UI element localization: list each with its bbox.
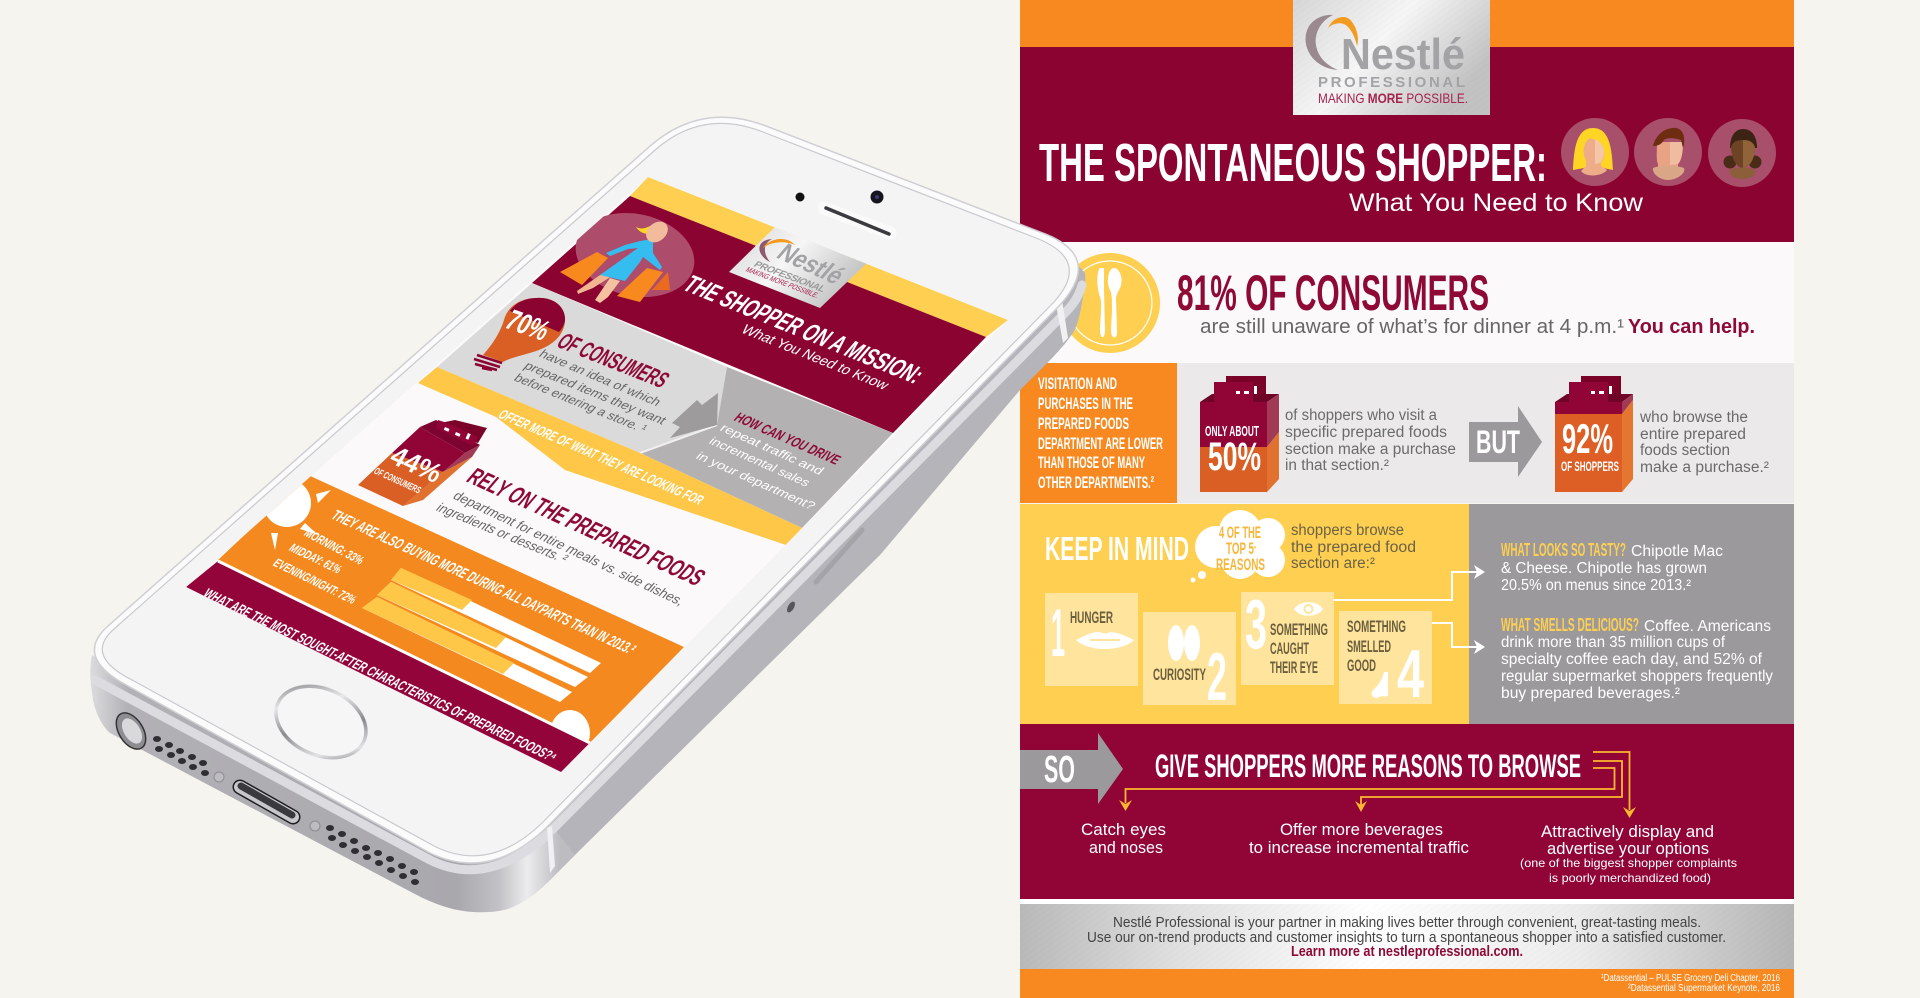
arrow: connector to tasty	[1334, 565, 1485, 600]
panel: footer message: Use our on-trend products and customer insights to turn a spontaneous shopper into a satisfied customer.	[1087, 930, 1726, 946]
delicious text: regular supermarket shoppers frequently	[1501, 668, 1773, 685]
call to action: You can help.	[1628, 316, 1755, 338]
arrow: to catch eyes	[1119, 768, 1614, 811]
screen: dayparts legend: MORNING: 33%	[301, 526, 368, 567]
screen: dayparts legend: MIDDAY: 61%	[286, 541, 346, 576]
visitation text block: PREPARED FOODS	[1038, 414, 1129, 433]
text: attractively display: Attractively display and	[1541, 823, 1714, 841]
screen: logo: Nestlé	[771, 239, 851, 289]
screen: 70%: 70%	[499, 305, 556, 347]
text: attractively display: is poorly merchandized food)	[1549, 871, 1711, 885]
screen: white wedge	[640, 425, 717, 453]
screen: yellow top band	[630, 177, 1008, 337]
panel: what looks tasty, what smells delicious	[1334, 504, 1794, 724]
reason 4: something smelled good: 4	[1397, 636, 1424, 712]
phone front camera and sensor	[796, 190, 884, 204]
panel: infographic page	[1020, 0, 1794, 998]
screen: rely text: ingredients or desserts. ²	[433, 500, 572, 566]
phone home button	[265, 673, 377, 771]
screen: footer divider	[218, 561, 590, 743]
panel: sources: ¹Datassential – PULSE Grocery Deli Chapter, 2016	[1601, 973, 1780, 984]
screen: maroon header	[532, 196, 986, 433]
tasty text: & Cheese. Chipotle has grown	[1501, 560, 1707, 577]
heading: KEEP IN MIND	[1045, 530, 1189, 567]
screen: drive traffic text: incremental sales	[706, 435, 813, 489]
panel: purchase comparison	[1177, 363, 1794, 503]
delicious text: buy prepared beverages.²	[1501, 685, 1680, 702]
reason 4: something smelled good: SOMETHING	[1347, 617, 1406, 636]
tasty text: 20.5% on menus since 2013.²	[1501, 577, 1691, 594]
text: attractively display: advertise your options	[1547, 840, 1709, 858]
tasty text	[1501, 540, 1723, 594]
shoppers who browse text: make a purchase.²	[1640, 459, 1769, 476]
screen: yellow swoosh	[418, 367, 802, 545]
screen: drive traffic text: HOW CAN YOU DRIVE	[730, 410, 844, 468]
reason 1: hunger: HUNGER	[1070, 608, 1113, 627]
reason 4: something smelled good	[1339, 611, 1432, 712]
subtitle: What You Need to Know	[1349, 189, 1644, 217]
screen: sun icon	[266, 484, 331, 550]
delicious text: specialty coffee each day, and 52% of	[1501, 651, 1763, 668]
screen: light grey panel	[437, 283, 727, 453]
shoppers who visit text: in that section.²	[1285, 457, 1389, 474]
icon: plate with fork and spoon	[1060, 253, 1160, 353]
visitation text block: PURCHASES IN THE	[1038, 394, 1133, 413]
screen: dayparts legend	[272, 530, 364, 604]
text: offer beverages: to increase incremental traffic	[1249, 839, 1469, 857]
arrow: to offer beverages	[1355, 761, 1622, 812]
text: attractively display: (one of the biggest shopper complaints	[1520, 856, 1737, 870]
screen: shopper illustration	[560, 213, 694, 303]
logo: Nestle Professional: Nestlé	[1341, 30, 1465, 79]
screen: of consumers heading: OF CONSUMERS	[551, 329, 675, 393]
logo: Nestle Professional	[1293, 0, 1490, 115]
shoppers who visit text: specific prepared foods	[1285, 424, 1447, 441]
reason 2: curiosity: CURIOSITY	[1153, 665, 1206, 684]
delicious text: Coffee. Americans	[1644, 618, 1771, 635]
visitation text block: THAN THOSE OF MANY	[1038, 453, 1145, 472]
phone mockup	[90, 117, 1085, 912]
screen: subtitle: What You Need to Know	[737, 322, 893, 393]
reason 3: something caught their eye: CAUGHT	[1270, 639, 1309, 658]
screen: footer text: WHAT ARE THE MOST SOUGHT-AFTER CHARACTERISTICS OF PREPARED FOODS?⁴	[199, 586, 560, 765]
reason 4: something smelled good: GOOD	[1347, 656, 1376, 675]
delicious text: WHAT SMELLS DELICIOUS?	[1501, 615, 1639, 635]
screen: maroon footer	[186, 561, 590, 776]
icon: bag 50%: ONLY ABOUT	[1205, 423, 1259, 440]
phone left speaker grille	[153, 736, 209, 776]
logo: Nestle Professional: MAKING MORE POSSIBLE.	[1318, 90, 1468, 106]
reason 2: curiosity	[1143, 612, 1236, 715]
icon: bag 92%: OF SHOPPERS	[1561, 458, 1619, 474]
screen: swoosh text: OFFER MORE OF WHAT THEY ARE LOOKING FOR	[494, 407, 707, 508]
screen: drive traffic text: in your department?	[693, 450, 818, 512]
phone side face	[500, 245, 1085, 883]
reason 1: hunger: 1	[1051, 595, 1065, 671]
shoppers who browse text	[1639, 409, 1769, 476]
text: offer beverages: Offer more beverages	[1280, 821, 1443, 839]
shoppers who browse text: entire prepared	[1640, 426, 1746, 443]
panel: footer message: Nestlé Professional is your partner in making lives better through convenient, great-tasting meals.	[1113, 915, 1701, 931]
screen: arrow	[670, 393, 718, 438]
shoppers who browse text: foods section	[1640, 442, 1730, 459]
screen: dayparts legend: EVENING/NIGHT: 72%	[270, 556, 360, 607]
icon: bag 50%	[1200, 376, 1279, 492]
arrow: connector to delicious	[1432, 623, 1485, 654]
reason 3: something caught their eye: THEIR EYE	[1270, 658, 1318, 677]
panel: footer message	[1020, 899, 1794, 969]
phone screen	[186, 177, 1008, 772]
shoppers who visit text: section make a purchase	[1285, 441, 1456, 458]
screen: rely text: department for entire meals vs. side dishes,	[450, 488, 688, 608]
panel: visitation	[1020, 363, 1177, 503]
phone side buttons	[785, 530, 862, 614]
title: THE SPONTANEOUS SHOPPER:	[1039, 133, 1547, 193]
header band	[1020, 0, 1794, 242]
screen: 44%: 44%	[385, 440, 448, 489]
heading: GIVE SHOPPERS MORE REASONS TO BROWSE	[1155, 748, 1581, 784]
screen: bag label: OF CONSUMERS	[371, 466, 423, 496]
reasons intro text: the prepared food	[1291, 539, 1416, 556]
text: offer beverages	[1249, 821, 1469, 857]
screen: logo: PROFESSIONAL	[751, 260, 828, 295]
screen: consumers text: prepared items they want	[521, 359, 670, 427]
phone glass inner rim	[102, 123, 1069, 856]
text: catch eyes: and noses	[1089, 839, 1163, 857]
arrow: to display	[1593, 752, 1636, 818]
reason 2: curiosity: 2	[1207, 639, 1227, 715]
shoppers who visit text: of shoppers who visit a	[1285, 407, 1437, 424]
screen: bag 44%	[358, 420, 487, 506]
thought cloud: REASONS	[1216, 555, 1265, 574]
text: catch eyes	[1081, 821, 1166, 857]
panel: sources: ²Datassential Supermarket Keynote, 2016	[1628, 983, 1780, 994]
reasons intro text: section are:²	[1291, 555, 1375, 572]
icon: brown-haired shopper avatar	[1634, 118, 1702, 186]
screen: dayparts heading: THEY ARE ALSO BUYING MORE DURING ALL DAYPARTS THAN IN 2013.²	[327, 508, 639, 658]
screen: drive traffic text	[693, 410, 844, 512]
icon: dark-haired shopper avatar	[1708, 119, 1776, 187]
stat description: are still unaware of what’s for dinner at 4 p.m.¹	[1200, 316, 1624, 338]
tasty text: Chipotle Mac	[1631, 543, 1723, 560]
logo: Nestle Professional: PROFESSIONAL	[1318, 74, 1465, 91]
panel: sources	[1020, 969, 1794, 998]
screen: dome icon	[552, 710, 590, 741]
highlight strips	[547, 300, 1068, 873]
tasty text: WHAT LOOKS SO TASTY?	[1501, 540, 1626, 560]
phone lightning port	[240, 786, 293, 817]
visitation text block: DEPARTMENT ARE LOWER	[1038, 434, 1163, 453]
screen: bar evening	[362, 597, 572, 702]
shoppers who browse text: who browse the	[1639, 409, 1748, 426]
panel: keep in mind	[1020, 504, 1469, 724]
arrow: BUT: BUT	[1476, 424, 1520, 460]
screen: bar morning	[391, 568, 601, 673]
delicious text: drink more than 35 million cups of	[1501, 634, 1726, 651]
stat heading: 81% OF CONSUMERS	[1177, 265, 1489, 321]
shoppers who visit text	[1285, 407, 1456, 474]
reason 3: something caught their eye: 3	[1245, 585, 1267, 663]
phone earpiece	[824, 208, 890, 234]
delicious text	[1501, 615, 1773, 702]
screen: drive traffic text: repeat traffic and	[717, 422, 827, 477]
panel: so give shoppers more reasons	[1020, 724, 1794, 899]
screen: consumers text: have an idea of which	[536, 347, 664, 409]
phone headphone jack	[110, 708, 152, 754]
text: catch eyes: Catch eyes	[1081, 821, 1166, 839]
phone chamfer bands	[95, 285, 1082, 870]
icon: bag 92%: 92%	[1562, 415, 1613, 462]
thought cloud: TOP 5	[1226, 539, 1254, 558]
screen: lightbulb icon	[474, 298, 565, 370]
visitation text block	[1038, 374, 1163, 492]
reason 3: something caught their eye: SOMETHING	[1270, 620, 1328, 639]
phone glass front	[94, 117, 1078, 863]
arrow: BUT	[1469, 406, 1542, 477]
arrow: SO: SO	[1044, 749, 1075, 791]
arrow: SO	[1020, 733, 1123, 804]
reasons intro text: shoppers browse	[1291, 522, 1404, 539]
screen: logo	[729, 227, 867, 308]
thought cloud: 4 OF THE	[1219, 523, 1261, 542]
thought cloud	[1190, 510, 1285, 582]
text: attractively display	[1520, 823, 1737, 885]
screen: orange panel	[218, 475, 684, 743]
icon: bag 92%	[1555, 376, 1633, 492]
screen: dark grey panel	[640, 367, 893, 528]
visitation text block: OTHER DEPARTMENTS.²	[1038, 473, 1154, 492]
panel: footer message: Learn more at nestleprofessional.com.	[1291, 944, 1523, 960]
screen: rely heading: RELY ON THE PREPARED FOODS	[461, 463, 712, 591]
screen: title: THE SHOPPER ON A MISSION:	[677, 271, 930, 389]
icon: bag 50%: 50%	[1208, 435, 1261, 479]
reason 4: something smelled good: SMELLED	[1347, 637, 1391, 656]
phone bottom face	[90, 655, 575, 912]
reasons intro text	[1291, 522, 1416, 572]
phone right speaker grille	[326, 825, 419, 885]
icon: blonde shopper avatar	[1561, 118, 1629, 186]
screen: consumers text: before entering a store. ¹	[511, 371, 651, 435]
panel: 81% of consumers	[1020, 242, 1794, 364]
visitation text block: VISITATION AND	[1038, 374, 1117, 393]
reason 1: hunger	[1045, 593, 1138, 686]
screen: logo: MAKING MORE POSSIBLE.	[744, 266, 821, 299]
phone screws	[214, 772, 320, 831]
reason 3: something caught their eye	[1241, 585, 1334, 685]
screen: bar midday	[377, 582, 588, 687]
